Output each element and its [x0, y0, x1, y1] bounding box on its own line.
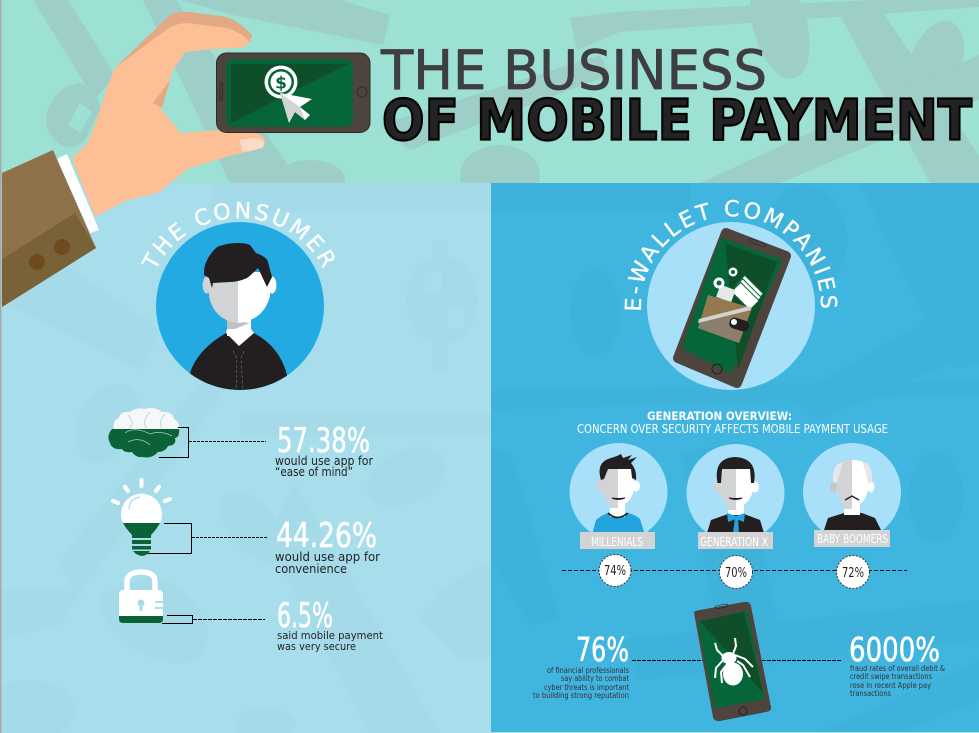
stat: 76 percent [533, 630, 703, 700]
stat: very secure [119, 572, 384, 653]
icon: consumer avatar [156, 222, 324, 395]
cuff buttons [29, 239, 70, 270]
stat: 76 percent: to building strong reputation [533, 690, 629, 700]
icon: landscape phone with dollar cursor: $ [275, 74, 287, 94]
wallet [698, 295, 752, 343]
avatar: baby boomers [803, 443, 901, 530]
caption: was very secure [277, 640, 356, 653]
icon: padlock [119, 572, 163, 623]
percentage timeline: 74% [604, 563, 626, 579]
icon: phone with bug [694, 602, 771, 721]
stat: convenience [113, 480, 381, 576]
icon: landscape phone with dollar cursor [216, 53, 370, 132]
connector [159, 428, 266, 458]
caption: would use app for [275, 453, 374, 468]
stat: 6000 percent: transactions [850, 688, 891, 698]
title line 1: THE BUSINESS [380, 39, 767, 102]
stat: 76 percent: 76% [576, 630, 629, 669]
hand [72, 23, 265, 217]
heading: generation overview [577, 409, 888, 436]
stat: 76 percent: of financial professionals [547, 665, 629, 675]
connector [148, 524, 267, 554]
stat: 6000 percent: 6000% [849, 630, 940, 669]
generation labels: MILLENIALS [591, 535, 643, 549]
stat: 76 percent: cyber threats is important [544, 682, 630, 692]
connector [162, 616, 265, 624]
caption: “ease of mind” [275, 464, 353, 479]
value: 57.38% [277, 421, 370, 461]
icon: light bulb [113, 480, 170, 556]
percentage timeline: 70% [725, 565, 747, 581]
title [380, 39, 972, 154]
generation labels [580, 530, 890, 549]
stat: 76 percent: say ability to combat [561, 673, 630, 683]
heading: the consumer: THE CONSUMER [141, 202, 335, 268]
stat: 6000 percent [762, 630, 945, 698]
value: 44.26% [276, 516, 377, 556]
shirt cuff [57, 154, 99, 233]
icon: hand holding phone [2, 12, 265, 307]
hand shadow [115, 12, 252, 68]
heading: generation overview: GENERATION OVERVIEW: [647, 409, 792, 423]
value: 6.5% [277, 596, 333, 636]
avatar: millennials [570, 443, 668, 541]
percentage timeline [562, 554, 907, 588]
icon: brain [108, 408, 179, 457]
stat: ease of mind [108, 408, 374, 479]
stat: 6000 percent: fraud rates of overall debit & [850, 663, 945, 673]
caption: said mobile payment [277, 629, 384, 642]
stat: 6000 percent: rose in recent Apple pay [850, 680, 931, 690]
heading: generation overview: CONCERN OVER SECURITY AFFECTS MOBILE PAYMENT USAGE [577, 422, 888, 436]
avatar: generation x [686, 444, 784, 532]
caption: would use app for [275, 549, 381, 564]
caption: convenience [275, 561, 347, 576]
icon: phone with wallet [647, 222, 815, 390]
thumb web [153, 70, 173, 108]
sleeve [2, 150, 96, 307]
percentage timeline: 72% [842, 565, 864, 581]
heading: e-wallet companies: E-WALLET COMPANIES [624, 200, 838, 310]
spider [715, 638, 753, 686]
generation labels: BABY BOOMERS [817, 532, 888, 546]
thumbnail [240, 138, 264, 152]
stat: 6000 percent: credit swipe transactions [850, 671, 932, 681]
generation labels: GENERATION X [700, 535, 768, 549]
cash and coins [714, 268, 765, 310]
